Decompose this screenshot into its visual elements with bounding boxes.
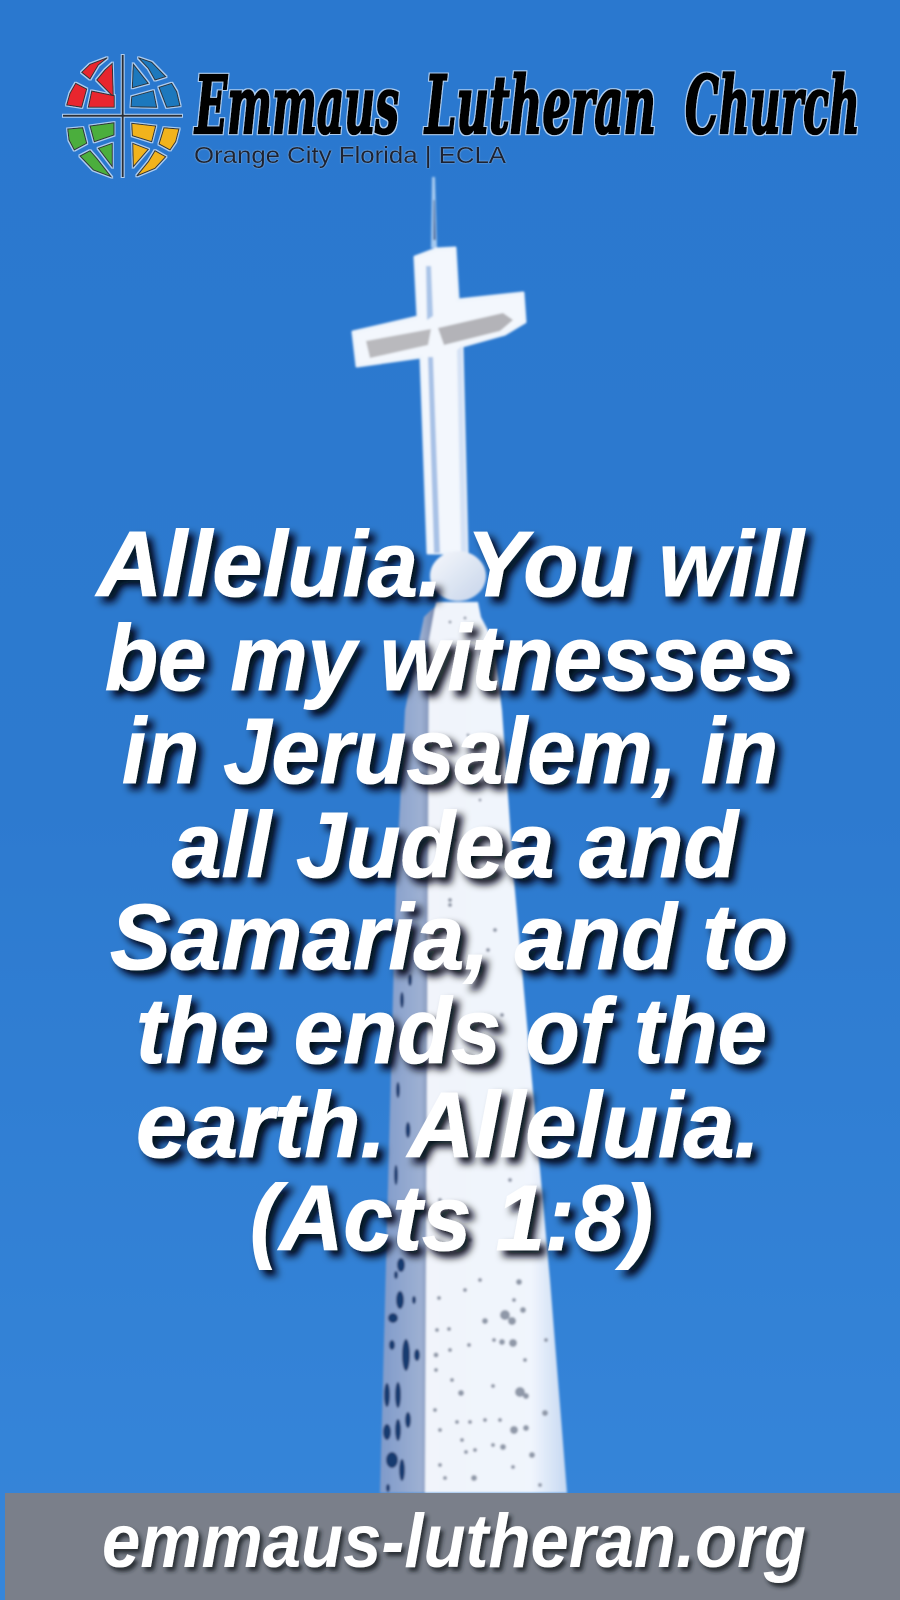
weathering marks on dark side (383, 902, 420, 1492)
website address: emmaus-lutheran.org (102, 1499, 806, 1584)
scripture verse: Alleluia. You will (95, 512, 806, 616)
spire shaft, shaded side (380, 604, 438, 1493)
spire lightning rod (431, 177, 437, 248)
blue quadrant (131, 58, 180, 107)
spire shaft, lit side (425, 602, 567, 1493)
scripture verse: be my witnesses (105, 606, 795, 710)
weathering speckles on lit side (433, 616, 548, 1487)
logo: Lutheran cross and globe (63, 55, 182, 177)
church name: Lutheran (424, 58, 656, 152)
spire ball finial (430, 551, 486, 601)
church spire photograph (353, 177, 567, 1493)
logo cross lines (63, 55, 182, 177)
cross (353, 248, 525, 553)
scripture verse (95, 512, 806, 1270)
green quadrant (68, 123, 114, 177)
yellow quadrant (132, 123, 179, 176)
scripture verse: all Judea and (172, 793, 740, 897)
scripture verse: the ends of the (136, 979, 767, 1083)
church location subtitle: Orange City Florida | ECLA (194, 142, 507, 168)
red quadrant (67, 58, 114, 107)
church name (194, 58, 860, 152)
footer bar (5, 1493, 900, 1600)
scripture verse: (Acts 1:8) (250, 1166, 653, 1270)
scripture verse: in Jerusalem, in (122, 699, 778, 803)
scripture verse: Samaria, and to (110, 885, 788, 989)
church name: Emmaus (194, 58, 399, 152)
scripture verse: earth. Alleluia. (136, 1073, 760, 1177)
